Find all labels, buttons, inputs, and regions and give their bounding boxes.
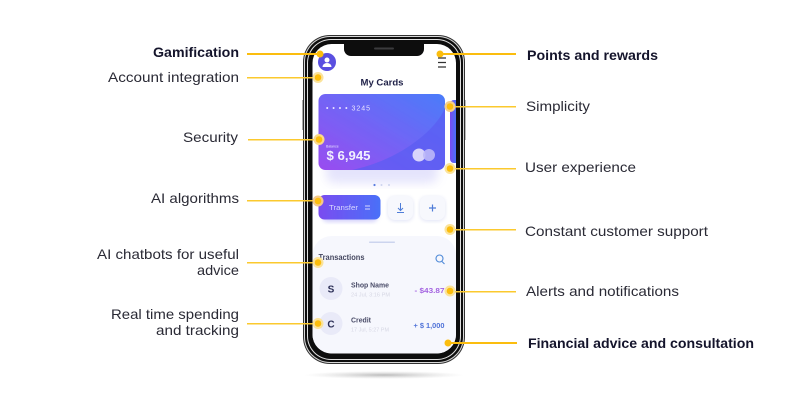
shop transaction: - $43.87 — [414, 286, 444, 295]
credit transaction: + $ 1,000 — [414, 321, 444, 330]
shop transaction: Shop Name — [351, 282, 389, 290]
callout: User experience — [444, 159, 636, 175]
callout: Real time spending: and tracking — [156, 322, 239, 338]
phone mockup — [302, 35, 466, 379]
transactions sheet — [312, 236, 456, 354]
credit transaction: Credit — [351, 318, 372, 324]
transfer button — [318, 195, 380, 222]
callout: Gamification — [153, 44, 324, 60]
callout: Real time spending: Real time spending — [111, 306, 239, 322]
callout: Points and rewards: Points and rewards — [527, 47, 658, 63]
callout: Real time spending — [111, 306, 324, 338]
callout: AI chatbots: advice — [197, 262, 239, 278]
transfer button: Transfer — [329, 205, 359, 212]
download button — [388, 196, 413, 221]
phone screen — [312, 44, 456, 354]
callout: Gamification: Gamification — [153, 44, 239, 60]
phone body — [302, 35, 466, 364]
search icon — [436, 255, 444, 264]
callout: Simplicity — [444, 98, 590, 114]
callout: AI algorithms — [151, 190, 324, 206]
credit transaction — [320, 312, 444, 335]
phone shadow — [304, 371, 464, 379]
profile avatar — [318, 53, 336, 71]
shop transaction — [320, 277, 444, 300]
main card: $ 6,945 — [326, 149, 371, 163]
callout: AI chatbots — [97, 246, 324, 278]
callout: AI algorithms: AI algorithms — [151, 190, 239, 206]
notch — [344, 44, 424, 56]
callout: Financial advice and consultation: Financial advice and consultation — [528, 335, 754, 351]
callout: Security: Security — [183, 129, 238, 145]
next card peek — [450, 100, 456, 163]
callout: User experience: User experience — [525, 159, 636, 175]
callout: Simplicity: Simplicity — [526, 98, 590, 114]
main card — [318, 94, 445, 170]
filter icon — [438, 58, 446, 67]
callout: Constant customer support: Constant customer support — [525, 223, 708, 239]
pagination dots — [373, 184, 390, 186]
callout: AI chatbots: AI chatbots for useful — [97, 246, 239, 262]
credit transaction: C — [327, 320, 335, 330]
card shadow — [326, 125, 438, 183]
callout: Alerts and notifications: Alerts and notifications — [526, 283, 679, 299]
callout: Security — [183, 129, 324, 145]
callout: Alerts and notifications — [444, 283, 679, 299]
main card: • • • • 3245 — [326, 106, 370, 112]
main card: Balance — [326, 144, 339, 148]
credit transaction: 17 Jul, 5:27 PM — [351, 328, 389, 334]
speaker — [374, 48, 394, 50]
callout: Account integration: Account integration — [108, 69, 239, 85]
add button — [420, 196, 445, 221]
callout: Account integration — [108, 69, 324, 85]
callout: Constant customer support — [444, 223, 708, 239]
callout: Points and rewards — [436, 47, 658, 63]
transactions heading: Transactions — [318, 253, 365, 262]
shop transaction: 24 Jul, 3:16 PM — [351, 292, 390, 298]
screen title: My Cards — [360, 78, 404, 88]
shop transaction: S — [328, 284, 335, 296]
